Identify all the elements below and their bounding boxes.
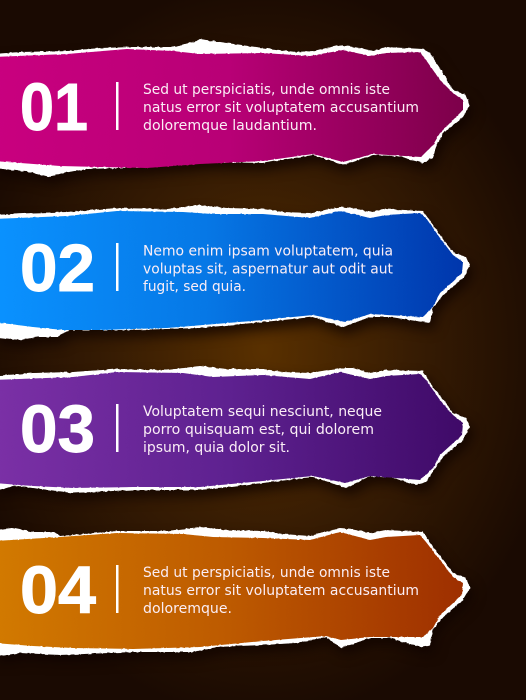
coloured ribbon 01	[0, 49, 463, 168]
text block 01	[143, 82, 419, 134]
text block 04: natus error sit voluptatem accusantium	[143, 583, 419, 599]
divider 02	[116, 243, 118, 291]
text block 01: natus error sit voluptatem accusantium	[143, 100, 419, 116]
torn white paper edge 02	[0, 205, 470, 340]
text block 03: Voluptatem sequi nesciunt, neque	[143, 404, 382, 420]
text block 02	[143, 244, 393, 295]
text block 01: doloremque laudantium.	[143, 118, 317, 134]
text block 02: voluptas sit, aspernatur aut odit aut	[143, 262, 393, 278]
text block 04	[143, 565, 419, 617]
divider 01	[116, 82, 118, 130]
text block 03: porro quisquam est, qui dolorem	[143, 422, 374, 438]
torn white paper edge 01	[0, 39, 470, 177]
torn white paper edge 03	[0, 366, 470, 493]
panel: step 01	[0, 39, 470, 177]
number 03: 03	[20, 392, 95, 467]
number 04: 04	[20, 553, 96, 628]
text block 02: fugit, sed quia.	[143, 279, 246, 295]
panel: step 03	[0, 366, 470, 493]
text block 04: Sed ut perspiciatis, unde omnis iste	[143, 565, 390, 581]
divider 04	[116, 565, 118, 613]
text block 04: doloremque.	[143, 601, 232, 617]
number 02: 02	[20, 231, 95, 306]
number 01: 01	[20, 70, 88, 145]
coloured ribbon 04	[0, 532, 463, 649]
coloured ribbon 02	[0, 211, 463, 330]
coloured ribbon 03	[0, 372, 463, 488]
torn white paper edge 04	[0, 527, 470, 657]
panel: step 02	[0, 205, 470, 340]
text block 03	[143, 404, 382, 456]
divider 03	[116, 404, 118, 452]
text block 01: Sed ut perspiciatis, unde omnis iste	[143, 82, 390, 98]
text block 03: ipsum, quia dolor sit.	[143, 440, 290, 456]
panel: step 04	[0, 527, 470, 657]
text block 02: Nemo enim ipsam voluptatem, quia	[143, 244, 393, 260]
